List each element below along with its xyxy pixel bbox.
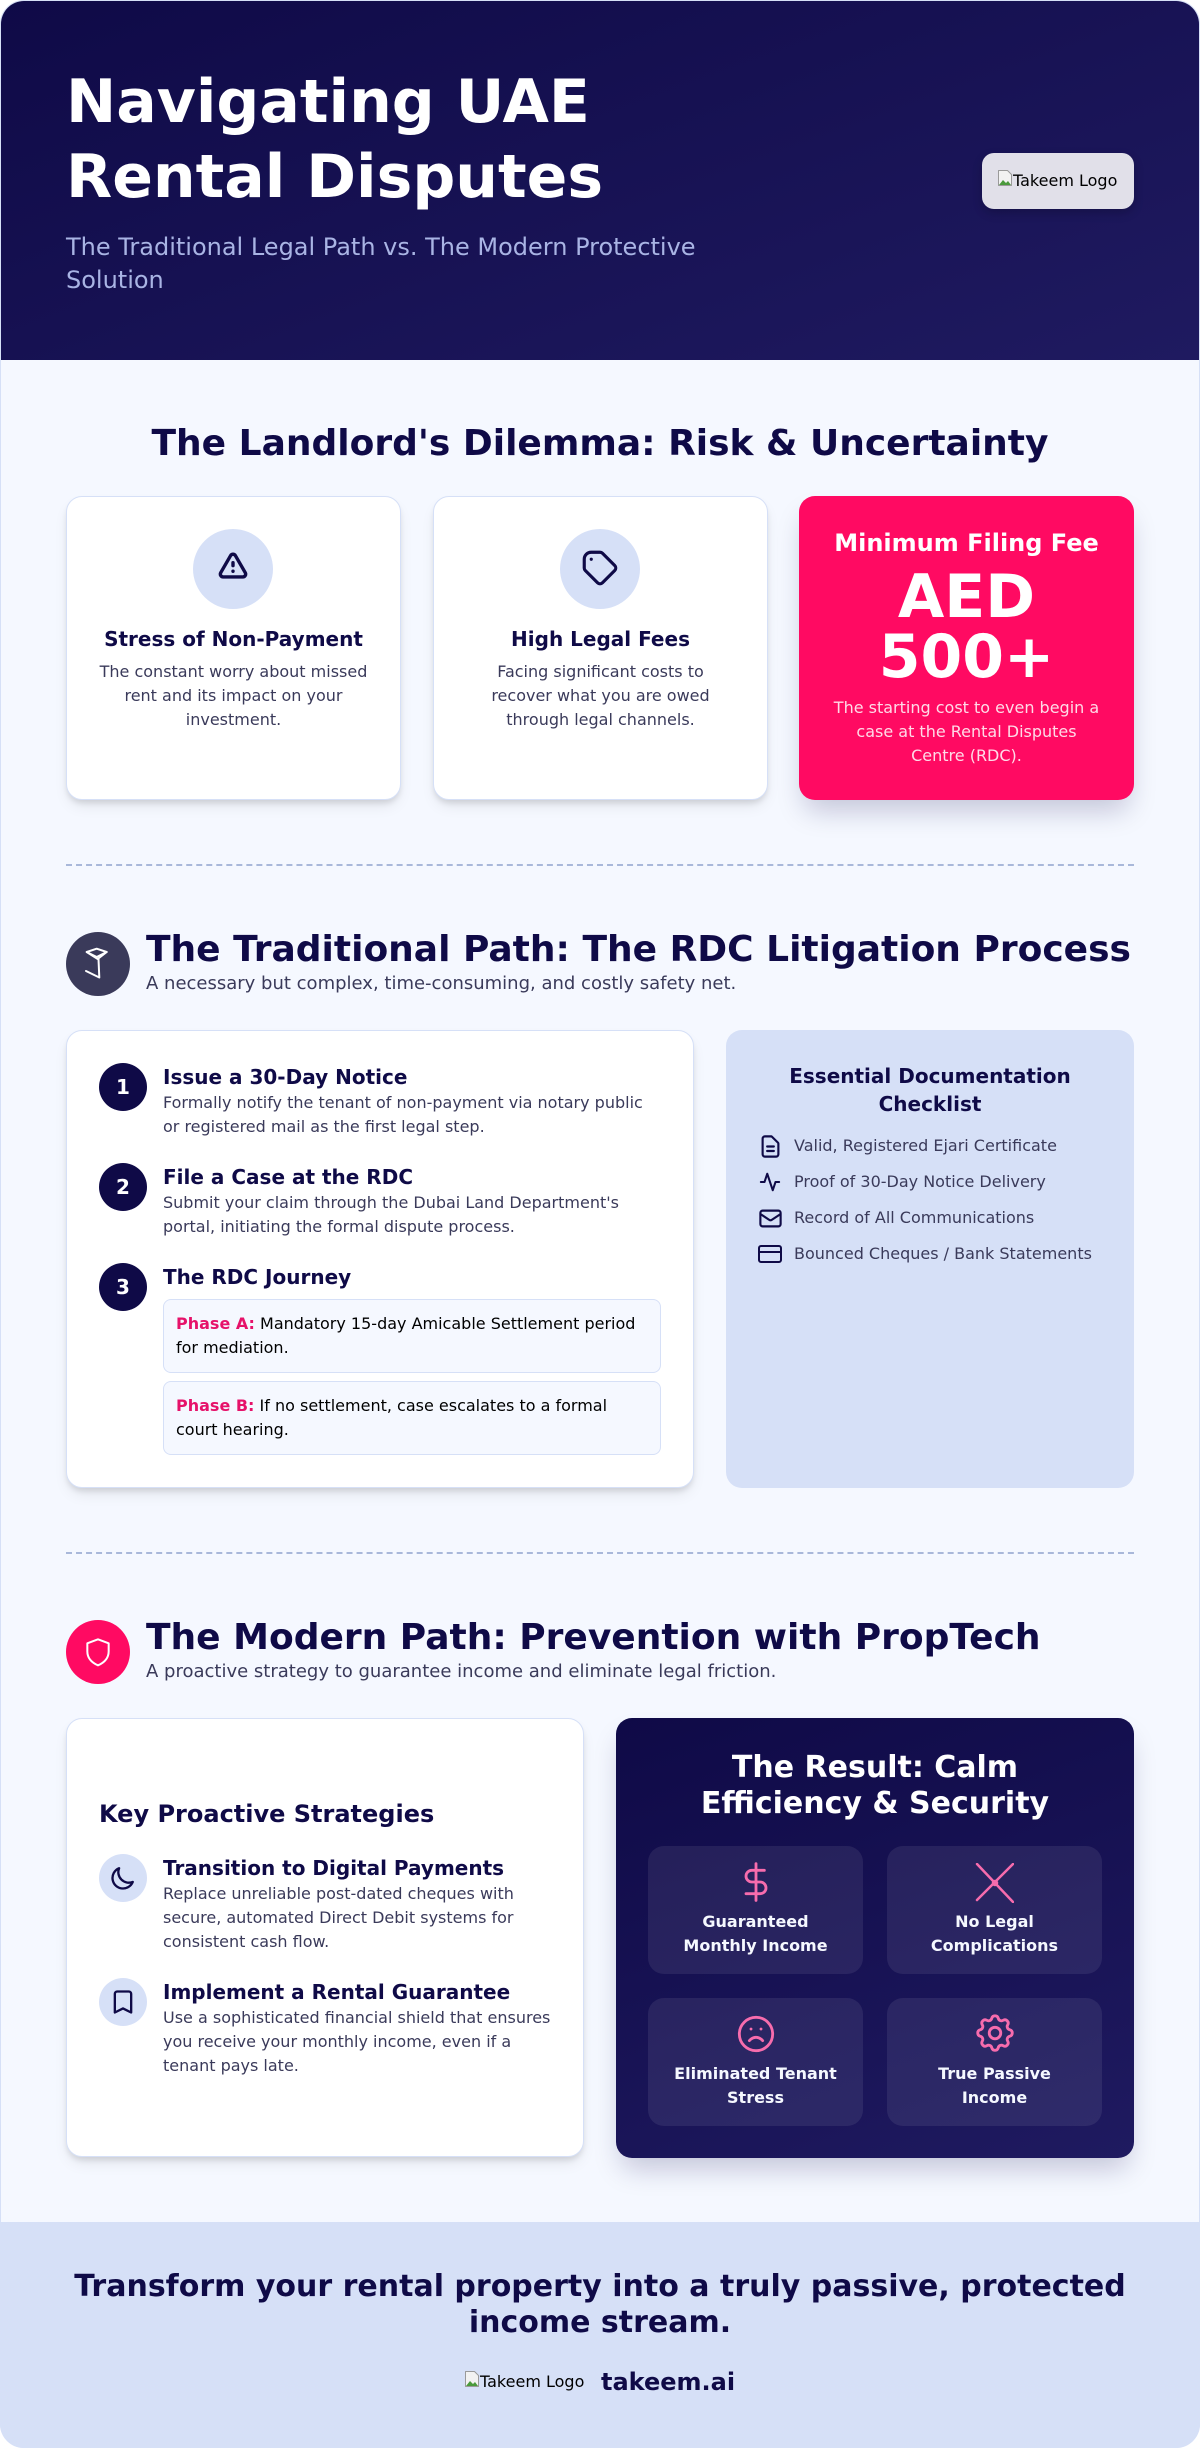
strategies heading: Key Proactive Strategies — [99, 1800, 434, 1828]
step number — [99, 1163, 147, 1211]
panel: high legal fees — [433, 496, 768, 800]
step text: Formally notify the tenant of non-payment via notary public — [163, 1092, 643, 1112]
strategy: digital payments — [99, 1854, 514, 1950]
step text: Submit your claim through the Dubai Land Department's — [163, 1192, 619, 1212]
card heading: Stress of Non-Payment — [104, 627, 363, 651]
section heading: dilemma: The Landlord's Dilemma: Risk & Uncertainty — [152, 423, 1048, 464]
item text: Valid, Registered Ejari Certificate — [794, 1136, 1057, 1155]
tile label — [683, 1912, 828, 1955]
tile: guaranteed income — [648, 1846, 863, 1974]
phase A: Phase A: Mandatory 15-day Amicable Settlement period — [176, 1314, 635, 1333]
icon: dollar — [744, 1862, 768, 1902]
step 3 title: The RDC Journey — [163, 1265, 351, 1289]
step number: 2 — [116, 1175, 130, 1199]
step text — [163, 1192, 619, 1236]
footer band — [0, 2222, 1200, 2448]
step 1 — [99, 1063, 643, 1136]
footer message — [74, 2269, 1126, 2340]
strategy text: secure, automated Direct Debit systems for — [163, 1908, 514, 1926]
section heading: modern path: The Modern Path: Prevention with PropTech — [146, 1616, 1041, 1658]
fee label: Minimum Filing Fee — [834, 529, 1099, 557]
section heading: traditional path: The Traditional Path: The RDC Litigation Process — [146, 929, 1131, 970]
strategy title: Implement a Rental Guarantee — [163, 1980, 510, 2004]
phase A — [163, 1299, 661, 1373]
fee note: case at the Rental Disputes — [856, 722, 1077, 741]
strategy text: Replace unreliable post-dated cheques with — [163, 1884, 514, 1902]
phase B — [163, 1381, 661, 1455]
title: Navigating UAE — [66, 67, 590, 137]
phase B: Phase B: If no settlement, case escalates to a formal — [176, 1396, 607, 1415]
phase A: for mediation. — [176, 1338, 289, 1357]
tile label — [931, 1912, 1058, 1955]
strategy text: tenant pays late. — [163, 2056, 299, 2074]
phase B: court hearing. — [176, 1420, 289, 1439]
strategy text: you receive your monthly income, even if a — [163, 2032, 511, 2050]
icon: card — [758, 1245, 782, 1263]
step number — [99, 1063, 147, 1111]
tile label — [938, 2064, 1051, 2107]
icon: shield — [66, 1620, 130, 1684]
header banner — [1, 1, 1199, 360]
step number: 1 — [116, 1075, 130, 1099]
fee note — [834, 698, 1099, 765]
section subheading: A proactive strategy to guarantee income and eliminate legal friction. — [146, 1661, 776, 1682]
item text: Proof of 30-Day Notice Delivery — [794, 1172, 1046, 1191]
tile label — [674, 2064, 837, 2107]
checklist heading: Essential Documentation — [789, 1064, 1071, 1088]
panel: litigation steps — [66, 1030, 694, 1488]
strategy text — [163, 2008, 550, 2074]
tile: eliminated stress — [648, 1998, 863, 2126]
title: Rental Disputes — [66, 142, 603, 212]
fee value — [879, 562, 1054, 692]
strategy text — [163, 1884, 514, 1950]
tile label: No Legal — [955, 1912, 1034, 1931]
panel: proactive strategies — [66, 1718, 584, 2157]
subtitle: Solution — [66, 266, 164, 294]
strategy title: Transition to Digital Payments — [163, 1856, 504, 1880]
step text — [163, 1092, 643, 1136]
item: communications — [759, 1208, 1034, 1228]
checklist heading — [789, 1064, 1071, 1116]
broken logo image: Takeem Logo — [1013, 171, 1117, 190]
fee value: 500+ — [879, 622, 1054, 692]
footer message: income stream. — [469, 2305, 731, 2340]
icon: crossed lines — [976, 1863, 1014, 1903]
tile label: Eliminated Tenant — [674, 2064, 837, 2083]
panel: documentation checklist — [726, 1030, 1134, 1488]
icon: document — [762, 1135, 780, 1158]
fee note: The starting cost to even begin a — [834, 698, 1099, 717]
step text: or registered mail as the first legal step. — [163, 1116, 485, 1136]
icon: warning triangle — [193, 529, 273, 609]
result heading: The Result: Calm — [732, 1750, 1018, 1785]
icon: sad face — [738, 2016, 774, 2052]
tile label: Monthly Income — [683, 1936, 828, 1955]
step title: Issue a 30-Day Notice — [163, 1065, 407, 1089]
card text — [491, 662, 710, 729]
broken logo image: Takeem Logo — [480, 2372, 584, 2391]
card text: recover what you are owed — [491, 686, 710, 705]
card text: The constant worry about missed — [100, 662, 367, 681]
card text: Facing significant costs to — [497, 662, 704, 681]
strategy text: Use a sophisticated financial shield that ensures — [163, 2008, 550, 2026]
footer brand — [465, 2368, 735, 2396]
logo badge — [982, 153, 1134, 209]
icon: traditional path — [66, 932, 130, 996]
icon: price tag — [560, 529, 640, 609]
tile: no legal complications — [887, 1846, 1102, 1974]
tile label: Complications — [931, 1936, 1058, 1955]
footer message: Transform your rental property into a truly passive, protected — [74, 2269, 1126, 2304]
step number: 3 — [116, 1275, 130, 1299]
item: ejari — [762, 1135, 1057, 1158]
icon: pulse — [760, 1172, 780, 1192]
brand name: takeem.ai — [601, 2368, 735, 2396]
title — [66, 67, 603, 212]
card text: rent and its impact on your — [124, 686, 343, 705]
section subheading: A necessary but complex, time-consuming, and costly safety net. — [146, 973, 736, 994]
result heading — [701, 1750, 1049, 1821]
result heading: Efficiency & Security — [701, 1786, 1049, 1821]
tile label: Guaranteed — [702, 1912, 809, 1931]
card text — [100, 662, 367, 729]
fee value: AED — [898, 562, 1035, 632]
item text: Record of All Communications — [794, 1208, 1034, 1227]
strategy: rental guarantee — [99, 1978, 550, 2074]
panel: the result — [616, 1718, 1134, 2158]
tile label: Stress — [727, 2088, 784, 2107]
strategy text: consistent cash flow. — [163, 1932, 329, 1950]
icon: gear — [976, 2014, 1014, 2052]
step 2 — [99, 1163, 619, 1236]
panel: minimum filing fee — [799, 496, 1134, 800]
item text: Bounced Cheques / Bank Statements — [794, 1244, 1092, 1263]
subtitle: The Traditional Legal Path vs. The Modern Protective — [66, 233, 696, 261]
item: notice — [760, 1172, 1046, 1192]
checklist heading: Checklist — [879, 1092, 981, 1116]
card heading: High Legal Fees — [511, 627, 690, 651]
step text: portal, initiating the formal dispute process. — [163, 1216, 515, 1236]
card text: investment. — [186, 710, 281, 729]
tile label: True Passive — [938, 2064, 1051, 2083]
item: cheques — [758, 1244, 1092, 1263]
icon: mail — [759, 1210, 782, 1228]
icon: bookmark — [99, 1978, 147, 2026]
fee note: Centre (RDC). — [911, 746, 1022, 765]
tile label: Income — [962, 2088, 1027, 2107]
step number — [99, 1263, 147, 1311]
tile: passive income — [887, 1998, 1102, 2126]
card text: through legal channels. — [506, 710, 695, 729]
step title: File a Case at the RDC — [163, 1165, 413, 1189]
subtitle — [66, 233, 696, 294]
icon: moon — [99, 1854, 147, 1902]
panel: stress of non-payment — [66, 496, 401, 800]
